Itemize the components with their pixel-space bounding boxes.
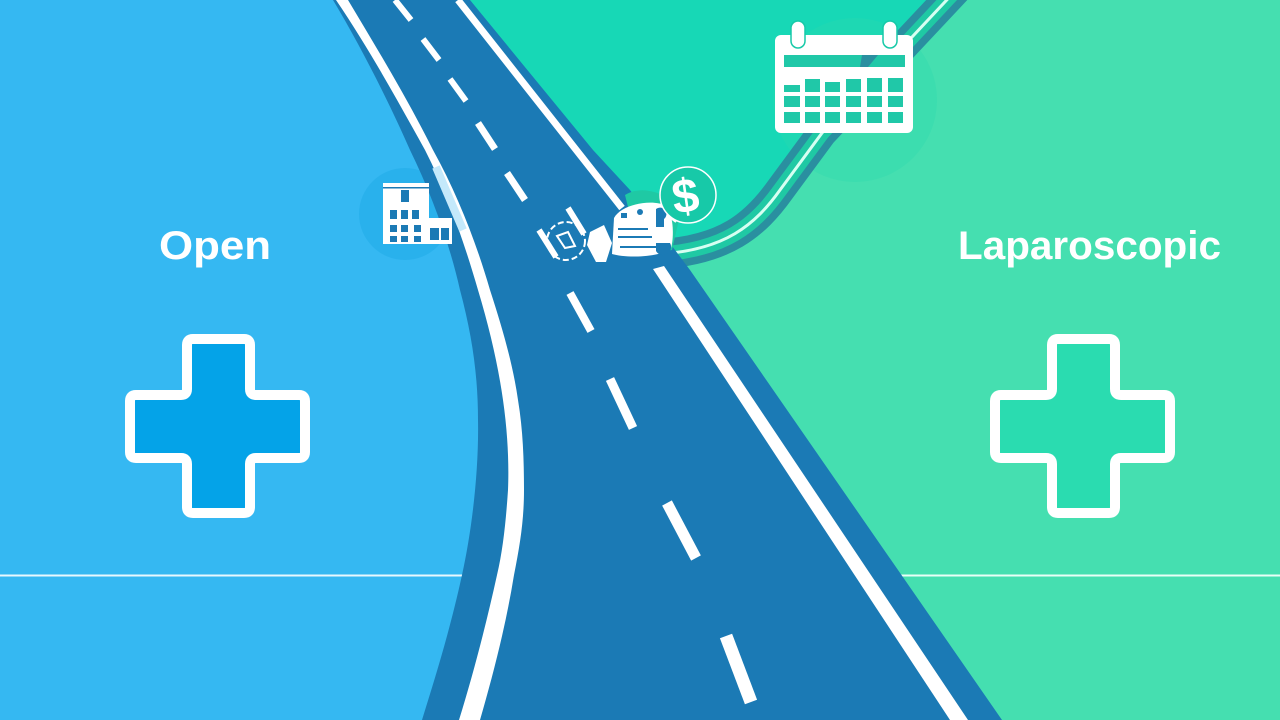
icon: laparoscopic medical cross [995,339,1170,513]
winding road [660,0,958,254]
main road [333,0,1002,720]
panel: open surgery background [0,0,700,720]
panel: laparoscopic background [640,0,1280,720]
icon cluster at road fork [539,167,716,262]
panel: left horizon line [0,574,470,576]
right road edge line lower [653,266,968,720]
icon: hospital and organ [612,203,673,256]
panel: upper teal wedge [460,0,947,268]
hospital glow [359,168,451,260]
right road edge line upper [458,0,622,208]
left line highlight [436,167,463,230]
icon: calendar [775,21,913,133]
icon: dollar coin: $ [669,169,703,225]
calendar glow [773,18,937,182]
icon: glove [587,225,612,262]
left road edge line [336,0,524,720]
panel: right horizon line [900,574,1280,576]
icon: open medical cross [130,339,305,513]
icon: dashed circle eye [539,222,585,260]
icon: dollar coin [660,167,716,225]
road centre dashes [395,0,751,702]
fork bump [625,190,680,255]
heading: Laparoscopic: Laparoscopic [958,224,1221,268]
heading: Open: Open [159,224,271,268]
icon: hospital building [383,183,452,244]
